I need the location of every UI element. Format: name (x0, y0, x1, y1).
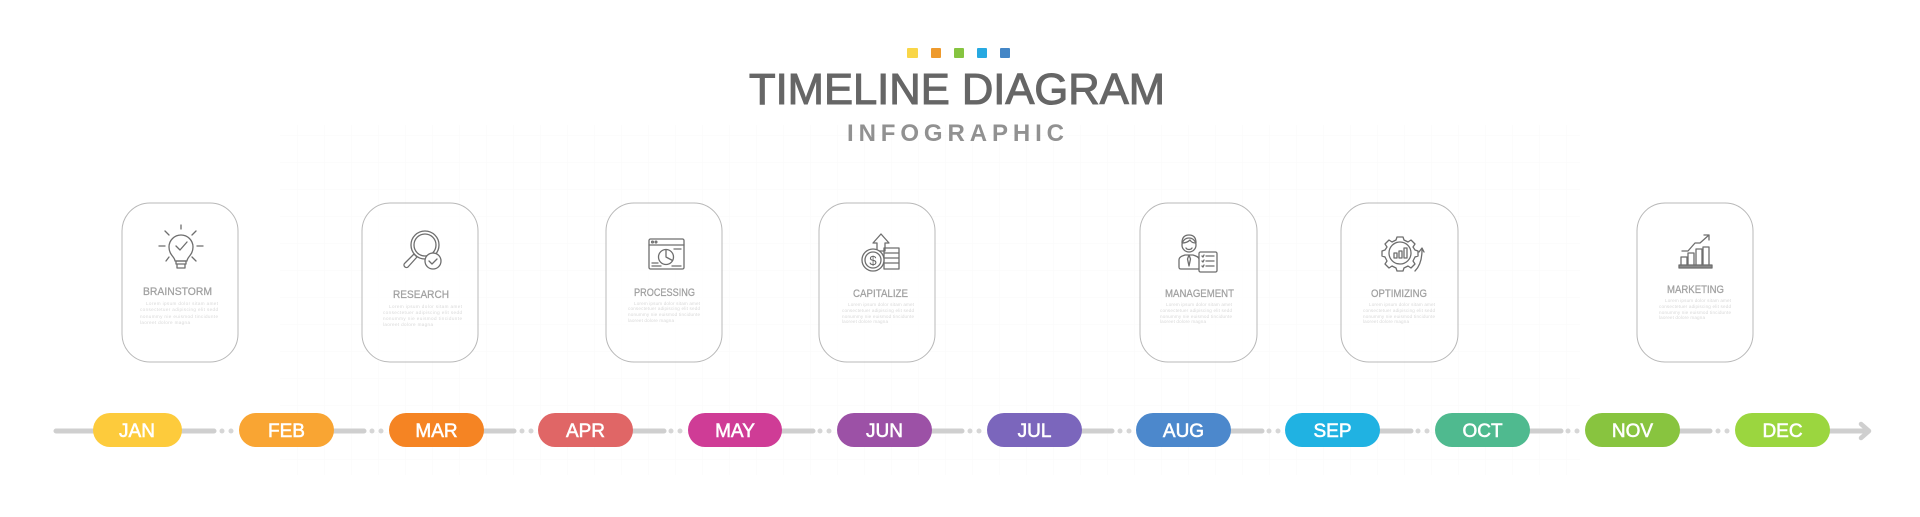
text block: laoreet dolore magna (628, 318, 674, 323)
text block: laoreet dolore magna (383, 322, 433, 327)
icon: coins with arrow (862, 234, 899, 271)
text block (383, 304, 463, 327)
text block (140, 301, 219, 325)
month: dec (1735, 413, 1830, 447)
heading: RESEARCH (393, 289, 449, 301)
month: may (688, 413, 782, 447)
month: nov: NOV (1612, 421, 1653, 442)
subtitle: INFOGRAPHIC (847, 120, 1064, 147)
text block: consectetuer adipiscing elit sedd (1363, 308, 1435, 313)
month: jan (93, 413, 182, 447)
heading: BRAINSTORM (143, 286, 212, 298)
panel: marketing (1637, 203, 1753, 362)
month: feb (239, 413, 334, 447)
text block: nonummy nie euismod tincidunte (383, 316, 462, 321)
month: aug: AUG (1163, 421, 1204, 442)
text block: consectetuer adipiscing elit sedd (842, 308, 914, 313)
title: TIMELINE DIAGRAM (749, 65, 1165, 114)
arrow (1861, 424, 1869, 438)
icon: manager with checklist (1179, 235, 1217, 272)
text block: consectetuer adipiscing elit sedd (1659, 304, 1731, 309)
panel: processing (606, 203, 722, 362)
heading: OPTIMIZING (1371, 288, 1427, 300)
text block: Lorem ipsum dolor sitam amet (1166, 302, 1233, 307)
text block: Lorem ipsum dolor sitam amet (1369, 302, 1436, 307)
panel: brainstorm (122, 203, 238, 362)
text block: consectetuer adipiscing elit sedd (1160, 308, 1232, 313)
panel: management (1140, 203, 1257, 362)
text block: nonummy nie euismod tincidunte (842, 314, 914, 319)
text block: laoreet dolore magna (140, 320, 190, 325)
text block: Lorem ipsum dolor sitam amet (634, 301, 701, 306)
icon: browser with pie chart (649, 239, 684, 269)
month: aug (1136, 413, 1231, 447)
text block: Lorem ipsum dolor sitam amet (389, 304, 463, 309)
month: jul (987, 413, 1082, 447)
timeline track (56, 428, 1868, 434)
month: jun: JUN (866, 421, 903, 442)
month: feb: FEB (268, 421, 305, 442)
panel: capitalize (819, 203, 935, 362)
text block (1160, 302, 1233, 324)
icon: magnifier with check (404, 231, 441, 269)
heading: MARKETING (1667, 284, 1724, 296)
icon: growth chart (1679, 235, 1712, 268)
text block: Lorem ipsum dolor sitam amet (848, 302, 915, 307)
icon: light bulb (159, 225, 203, 268)
text block: Lorem ipsum dolor sitam amet (1665, 298, 1732, 303)
text block: laoreet dolore magna (1160, 319, 1206, 324)
text block: nonummy nie euismod tincidunte (140, 314, 218, 319)
month: oct (1435, 413, 1530, 447)
month: mar (389, 413, 484, 447)
text block: laoreet dolore magna (1363, 319, 1409, 324)
text block (628, 301, 701, 323)
text block (842, 302, 915, 324)
icon: gear with bars (1382, 237, 1424, 271)
icon: dollar sign: $ (869, 253, 877, 268)
text block: nonummy nie euismod tincidunte (628, 312, 700, 317)
month: mar: MAR (415, 421, 458, 442)
text block: laoreet dolore magna (842, 319, 888, 324)
panel: research (362, 203, 478, 362)
month: sep: SEP (1313, 421, 1352, 442)
text block: consectetuer adipiscing elit sedd (383, 310, 462, 315)
text block (1363, 302, 1436, 324)
month: jul: JUL (1018, 421, 1051, 442)
text block: nonummy nie euismod tincidunte (1160, 314, 1232, 319)
heading: PROCESSING (634, 287, 695, 299)
text block: nonummy nie euismod tincidunte (1659, 310, 1731, 315)
month: sep (1285, 413, 1380, 447)
text block: Lorem ipsum dolor sitam amet (146, 301, 219, 306)
month: may: MAY (715, 421, 755, 442)
month: dec: DEC (1762, 421, 1803, 442)
panel: optimizing (1341, 203, 1458, 362)
heading: CAPITALIZE (853, 288, 908, 300)
month: nov (1585, 413, 1680, 447)
text block: nonummy nie euismod tincidunte (1363, 314, 1435, 319)
colour dots (907, 48, 1010, 58)
text block: laoreet dolore magna (1659, 315, 1705, 320)
month: jan: JAN (119, 421, 155, 442)
text block: consectetuer adipiscing elit sedd (628, 306, 700, 311)
text block (1659, 298, 1732, 320)
text block: consectetuer adipiscing elit sedd (140, 307, 218, 312)
month: oct: OCT (1462, 421, 1503, 442)
heading: MANAGEMENT (1165, 288, 1234, 300)
month: jun (837, 413, 932, 447)
month: apr: APR (566, 421, 605, 442)
month: apr (538, 413, 633, 447)
